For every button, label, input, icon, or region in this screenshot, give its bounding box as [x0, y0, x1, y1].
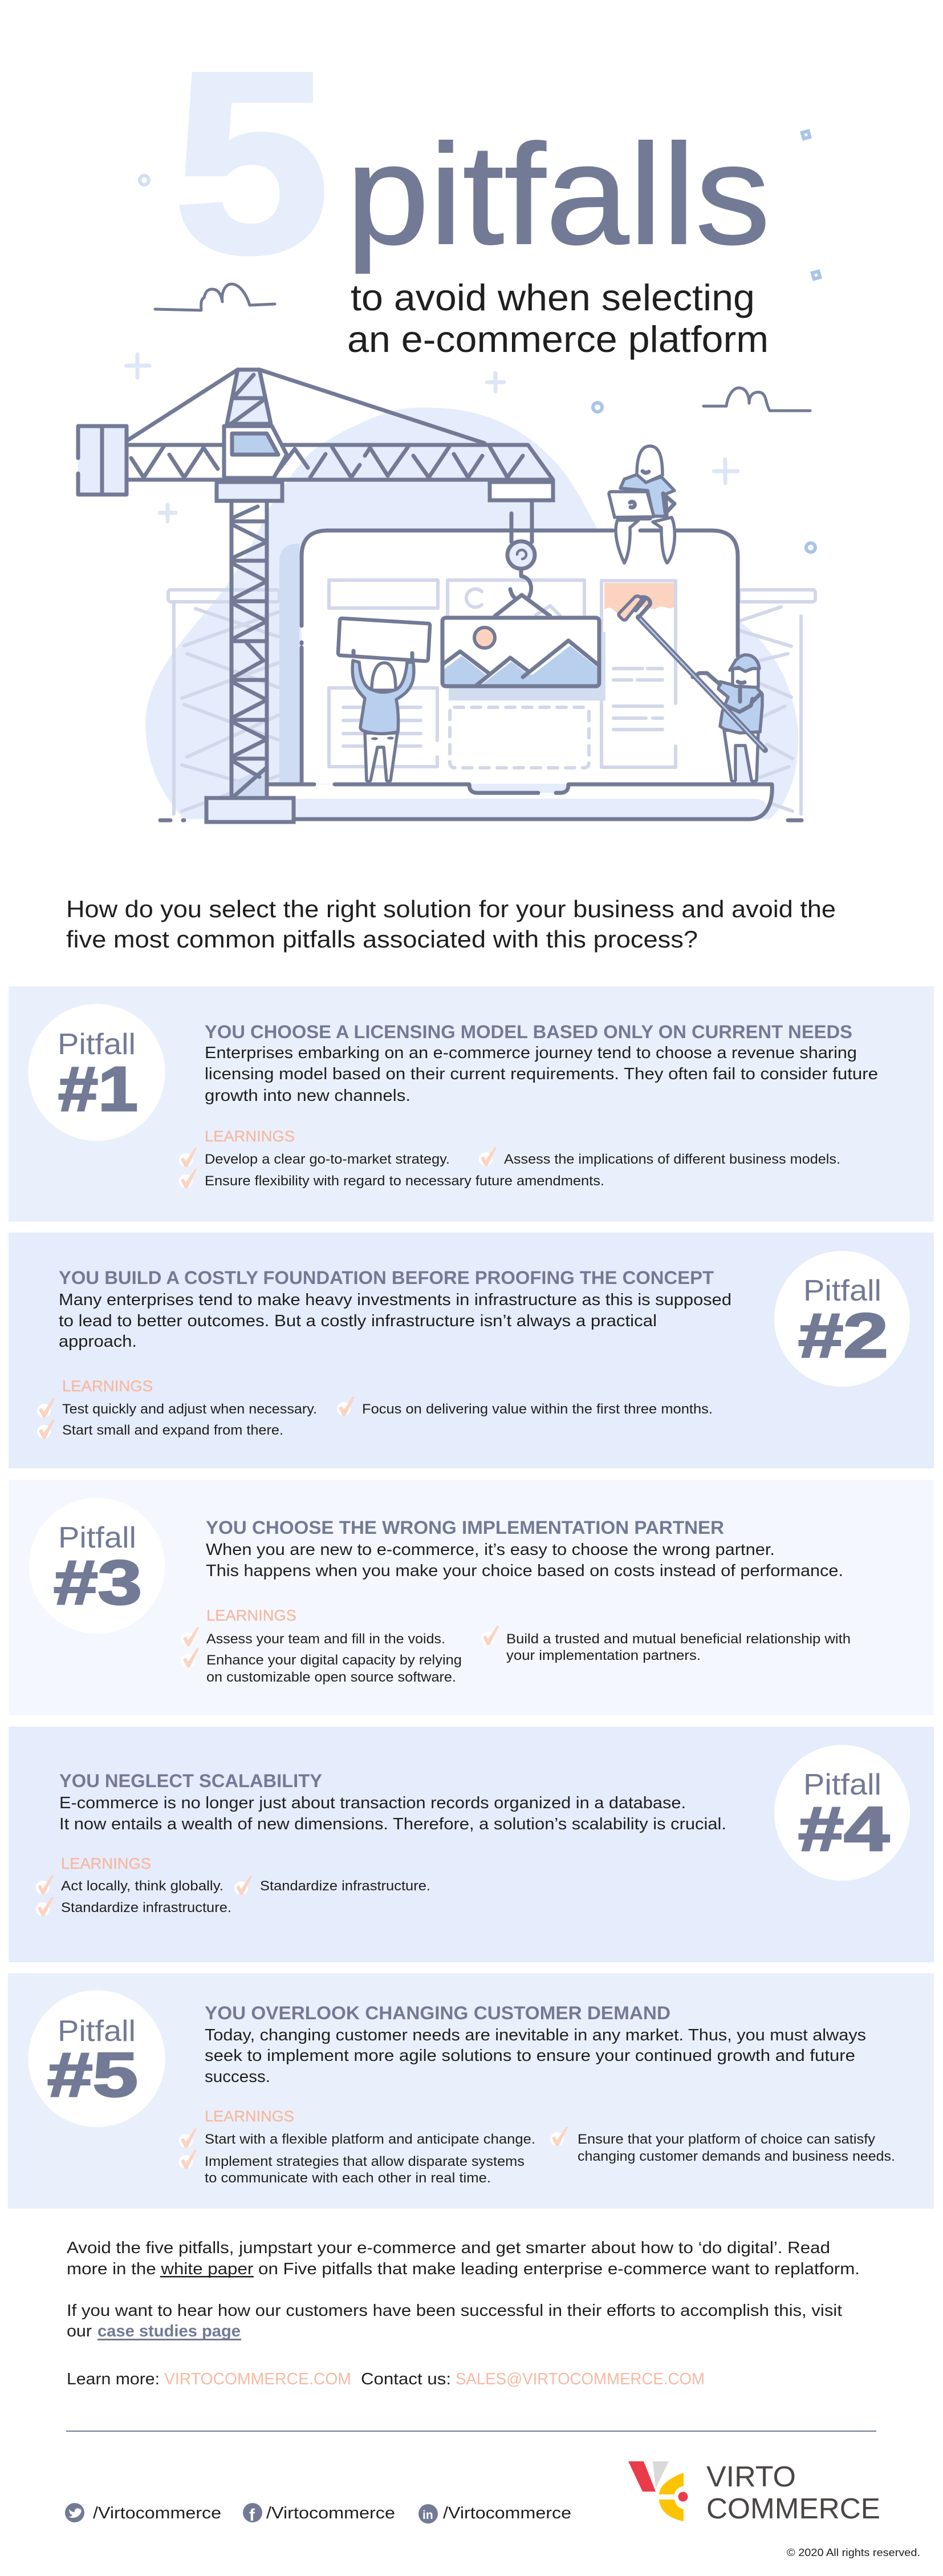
badge: pitfall 2: #2: [798, 1301, 888, 1371]
learnings heading: LEARNINGS: [205, 2108, 294, 2125]
subtitle: [347, 277, 769, 360]
closing text: case studies: If you want to hear how our customers have been successful in their efforts to accomplish this, visit: [67, 2302, 842, 2320]
body text: pitfall 5: success.: [205, 2068, 270, 2086]
panel: pitfall 1: [9, 986, 934, 1222]
learnings heading: LEARNINGS: [205, 1128, 295, 1145]
body text: pitfall 5: Today, changing customer needs are inevitable in any market. Thus, you must always: [205, 2026, 866, 2044]
body text: pitfall 1: Enterprises embarking on an e-commerce journey tend to choose a revenue sharing: [205, 1044, 857, 1062]
crane jib: [127, 445, 553, 480]
logo wordmark: VIRTO: [706, 2460, 796, 2493]
logo wordmark: [706, 2460, 880, 2525]
body text: pitfall 5: [205, 2026, 866, 2086]
intro question: How do you select the right solution for your business and avoid the: [66, 896, 836, 922]
body text: pitfall 5: seek to implement more agile solutions to ensure your continued growth and future: [205, 2047, 855, 2065]
badge: pitfall 5: #5: [47, 2040, 138, 2110]
painter legs: [724, 730, 758, 781]
crane counterweight: [78, 426, 127, 495]
body text: pitfall 2: Many enterprises tend to make heavy investments in infrastructure as this is supposed: [59, 1291, 731, 1309]
learnings list: Start small and expand from there.: [62, 1423, 283, 1438]
picture mountains: [444, 646, 597, 686]
contact links: Learn more:: [67, 2370, 160, 2388]
badge: pitfall 1: [29, 1004, 165, 1141]
closing text: case studies: case studies page: [97, 2322, 241, 2340]
learnings heading: LEARNINGS: [62, 1378, 153, 1395]
badge: pitfall 2: [774, 1251, 910, 1387]
panel: pitfall 5: [8, 1973, 934, 2209]
roller pole: [639, 617, 765, 750]
learnings list: Test quickly and adjust when necessary.: [62, 1402, 317, 1417]
heading: pitfall 2: YOU BUILD A COSTLY FOUNDATION BEFORE PROOFING THE CONCEPT: [59, 1267, 714, 1288]
painter shirt: [718, 682, 762, 733]
heading: pitfall 3: YOU CHOOSE THE WRONG IMPLEMENTATION PARTNER: [206, 1517, 724, 1538]
learnings list: Ensure flexibility with regard to necessary future amendments.: [205, 1173, 604, 1189]
laptop base: [160, 784, 802, 820]
panel: pitfall 3: [9, 1480, 934, 1715]
learnings heading: LEARNINGS: [206, 1607, 296, 1624]
closing text: white paper: [67, 2239, 860, 2278]
learnings list: your implementation partners.: [506, 1648, 701, 1663]
learnings list: [37, 1396, 713, 1439]
body text: pitfall 2: to lead to better outcomes. But a costly infrastructure isn’t always a practical: [59, 1312, 657, 1330]
learnings list: Standardize infrastructure.: [260, 1878, 430, 1894]
person sitting with a laptop: [609, 446, 674, 563]
learnings list: Standardize infrastructure.: [61, 1900, 231, 1915]
badge: pitfall 1: #1: [58, 1054, 138, 1124]
copyright: © 2020 All rights reserved.: [787, 2547, 920, 2558]
person head: [372, 663, 396, 690]
head: [637, 446, 662, 483]
learnings list: Assess your team and fill in the voids.: [206, 1631, 445, 1647]
person painting with a roller: [619, 596, 765, 781]
learnings list: Act locally, think globally.: [61, 1878, 223, 1894]
decorative sparkles: [126, 131, 820, 552]
body text: pitfall 1: growth into new channels.: [205, 1087, 410, 1105]
intro question: [66, 896, 836, 953]
screen wireframe panels: [329, 580, 676, 768]
contact links: Contact us:: [361, 2370, 451, 2388]
logo mark: [628, 2461, 688, 2521]
painter hard hat: [730, 655, 759, 671]
panel: pitfall 4: [9, 1727, 934, 1962]
learnings list: [179, 2127, 895, 2186]
icon: linkedin: in: [422, 2509, 433, 2522]
clouds: [155, 284, 810, 411]
hanging picture: [442, 618, 605, 700]
closing text: case studies: our: [67, 2322, 92, 2340]
learnings list: Enhance your digital capacity by relying: [206, 1652, 462, 1668]
heading: pitfalls: pitfalls: [346, 115, 770, 274]
person holding a sign: [338, 618, 430, 781]
subtitle: an e-commerce platform: [347, 318, 769, 360]
sign board: [338, 618, 430, 661]
crane base: [206, 798, 294, 822]
badge: pitfall 4: Pitfall: [803, 1768, 881, 1801]
badge: pitfall 5: [29, 1990, 165, 2127]
body text: pitfall 2: [59, 1291, 731, 1351]
crane cab: [224, 426, 287, 478]
subtitle: to avoid when selecting: [351, 277, 755, 318]
badge: pitfall 3: [29, 1498, 165, 1634]
closing text: white paper: more in the white paper on Five pitfalls that make leading enterprise e-commerce want to replatform.: [67, 2260, 860, 2278]
learnings list: Develop a clear go-to-market strategy.: [205, 1152, 450, 1167]
contact links: SALES@VIRTOCOMMERCE.COM: [456, 2370, 705, 2388]
closing text: case studies: [67, 2302, 842, 2340]
badge: pitfall 4: [774, 1745, 910, 1881]
social links: [65, 2503, 571, 2525]
badge: pitfall 4: #4: [798, 1794, 889, 1864]
big number 5: 5: [173, 18, 330, 306]
badge: pitfall 5: Pitfall: [58, 2015, 136, 2048]
badge: pitfall 3: Pitfall: [58, 1521, 136, 1554]
body text: pitfall 3: [206, 1541, 843, 1580]
roller head: [636, 597, 650, 617]
body text: pitfall 3: This happens when you make your choice based on costs instead of performance.: [206, 1562, 843, 1580]
closing text: white paper: Avoid the five pitfalls, jumpstart your e-commerce and get smarter about how to ‘do digital’. Read: [67, 2239, 830, 2257]
learnings list: changing customer demands and business needs.: [578, 2149, 895, 2164]
logo wordmark: COMMERCE: [706, 2492, 880, 2525]
icon: facebook: [243, 2503, 262, 2525]
illustration: crane building a laptop storefront: [78, 131, 820, 822]
heading: pitfall 4: YOU NEGLECT SCALABILITY: [59, 1771, 322, 1791]
learnings list: [181, 1626, 851, 1685]
icon: twitter: [65, 2503, 84, 2522]
learnings list: [36, 1875, 430, 1916]
crane: [78, 370, 553, 822]
learnings list: [179, 1147, 840, 1189]
learnings list: Ensure that your platform of choice can satisfy: [578, 2132, 875, 2147]
laptop screen: [279, 530, 738, 784]
linkedin handle: /Virtocommerce: [443, 2504, 571, 2522]
laptop: [609, 492, 654, 517]
learnings list: to communicate with each other in real time.: [205, 2170, 491, 2186]
contact links: [67, 2370, 705, 2388]
crane trolley: [490, 482, 553, 500]
painter head: [733, 669, 758, 687]
badge: pitfall 1: Pitfall: [58, 1028, 136, 1061]
badge: pitfall 3: #3: [54, 1548, 142, 1618]
learnings list: Implement strategies that allow disparate systems: [205, 2154, 525, 2169]
scaffolding: [168, 590, 815, 814]
heading: pitfall 1: YOU CHOOSE A LICENSING MODEL BASED ONLY ON CURRENT NEEDS: [205, 1022, 852, 1042]
logo: Virto Commerce: [628, 2460, 880, 2525]
twitter handle: /Virtocommerce: [93, 2504, 221, 2522]
person sweater: [352, 661, 414, 734]
icon: linkedin: [418, 2504, 438, 2524]
panel: pitfall 2: [9, 1233, 934, 1468]
crane collar: [217, 482, 282, 501]
learnings heading: LEARNINGS: [61, 1855, 151, 1872]
crane stays and A-frame: [127, 370, 485, 443]
badge: pitfall 2: Pitfall: [803, 1274, 881, 1307]
facebook handle: /Virtocommerce: [266, 2504, 395, 2522]
intro question: five most common pitfalls associated with this process?: [66, 926, 698, 953]
body text: pitfall 3: When you are new to e-commerce, it’s easy to choose the wrong partner.: [206, 1541, 775, 1559]
learnings list: on customizable open source software.: [206, 1670, 456, 1685]
shirt: [620, 475, 674, 516]
person legs: [365, 733, 397, 781]
background blob: [145, 408, 798, 819]
learnings list: Focus on delivering value within the first three months.: [362, 1402, 713, 1417]
body text: pitfall 4: It now entails a wealth of new dimensions. Therefore, a solution’s scalability is crucial.: [59, 1815, 726, 1833]
learnings list: Build a trusted and mutual beneficial relationship with: [506, 1631, 851, 1647]
body text: pitfall 1: [205, 1044, 878, 1105]
picture sun: [474, 627, 495, 648]
learnings list: Assess the implications of different business models.: [504, 1152, 840, 1167]
body text: pitfall 2: approach.: [59, 1332, 137, 1351]
icon: facebook: f: [249, 2506, 255, 2525]
seated legs: [616, 520, 639, 563]
crane hook and pulley: [495, 500, 550, 616]
contact links: VIRTOCOMMERCE.COM: [164, 2370, 351, 2388]
body text: pitfall 4: [59, 1794, 726, 1833]
title: [173, 18, 770, 360]
body text: pitfall 4: E-commerce is no longer just about transaction records organized in a database.: [59, 1794, 686, 1812]
crane mast: [231, 501, 267, 797]
heading: pitfall 5: YOU OVERLOOK CHANGING CUSTOMER DEMAND: [205, 2003, 670, 2023]
learnings list: Start with a flexible platform and anticipate change.: [205, 2132, 535, 2147]
body text: pitfall 1: licensing model based on their current requirements. They often fail to consider future: [205, 1065, 878, 1083]
